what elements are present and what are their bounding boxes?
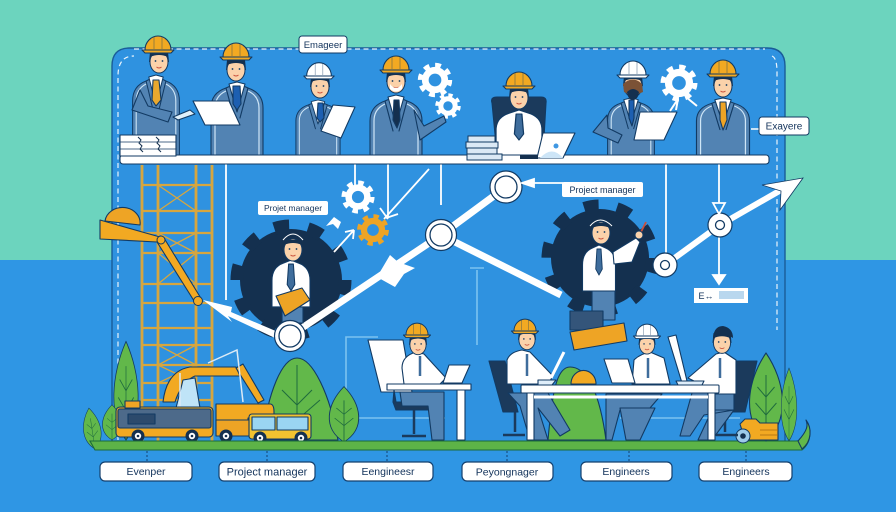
label: Eengineesr [343, 462, 433, 481]
person: seated engineer d [668, 326, 757, 440]
right foliage [750, 353, 810, 449]
bottom labels row [100, 451, 792, 481]
person: seated engineer b [489, 319, 570, 440]
bush behind table [548, 367, 606, 440]
person: engineer 1 [132, 36, 195, 155]
icon: gears top middle [421, 66, 458, 116]
label: Engineers 2: Engineers [722, 466, 770, 478]
stack of papers [120, 135, 176, 156]
person: project manager right gear [583, 220, 646, 320]
label: Projet manager [258, 201, 328, 215]
label: Evenper: Evenper [126, 466, 166, 478]
label: Exayere: Exayere [766, 122, 803, 132]
left foliage [80, 341, 138, 450]
icon: hard hat on table [571, 370, 596, 384]
label: Project manager top: Project manager [569, 185, 636, 195]
label: Project manager top [562, 182, 643, 197]
laptop on desk [520, 133, 575, 159]
label: Eengineesr: Eengineesr [361, 466, 415, 478]
shelf pillars [226, 164, 719, 300]
stack of books [466, 136, 502, 160]
roller machine [736, 419, 778, 443]
person: seated engineer at left desk [368, 323, 471, 440]
label: Project manager [219, 462, 315, 481]
label: Engineers 1 [581, 462, 672, 481]
icon: toolbox [570, 311, 627, 350]
label: Engineers 1: Engineers [602, 466, 650, 478]
meeting table [521, 380, 719, 440]
label: Engineers 2 [699, 462, 792, 481]
big gear left [237, 226, 345, 334]
shelf [120, 155, 769, 164]
person: seated engineer c [604, 324, 670, 440]
excavator arm [100, 207, 202, 306]
label: Emageer [299, 36, 347, 53]
person: engineer with laptop [593, 61, 677, 166]
label: Exayere [751, 117, 809, 135]
small connector arrows [326, 169, 725, 284]
big gear right [548, 206, 652, 310]
panel: blueprint board [112, 48, 785, 448]
person: project manager left gear [272, 234, 310, 323]
label: small legend [694, 288, 748, 303]
node on gear [274, 320, 306, 352]
bush and leaf [262, 358, 359, 442]
label: small legend: E↔ [698, 291, 714, 301]
scaffold tower [142, 165, 212, 445]
label: Emageer: Emageer [304, 40, 342, 51]
label: Peyongnager [462, 462, 553, 481]
icon: gears centre [344, 183, 386, 243]
label: Evenper [100, 462, 192, 481]
label: Peyongnager: Peyongnager [476, 466, 539, 478]
ground strip [90, 428, 810, 450]
person: engineer 4 [369, 56, 446, 154]
label: Projet manager: Projet manager [264, 203, 322, 213]
person: seated manager [492, 72, 546, 156]
person: engineer 7 [696, 60, 750, 168]
icon: gear top right [664, 68, 697, 111]
person: engineer 3 with clipboard [296, 63, 355, 164]
trend line with arrow [203, 171, 803, 338]
label: Project manager: Project manager [227, 466, 308, 478]
construction vehicles [116, 350, 311, 444]
person: engineer 2 with laptop [193, 43, 263, 162]
